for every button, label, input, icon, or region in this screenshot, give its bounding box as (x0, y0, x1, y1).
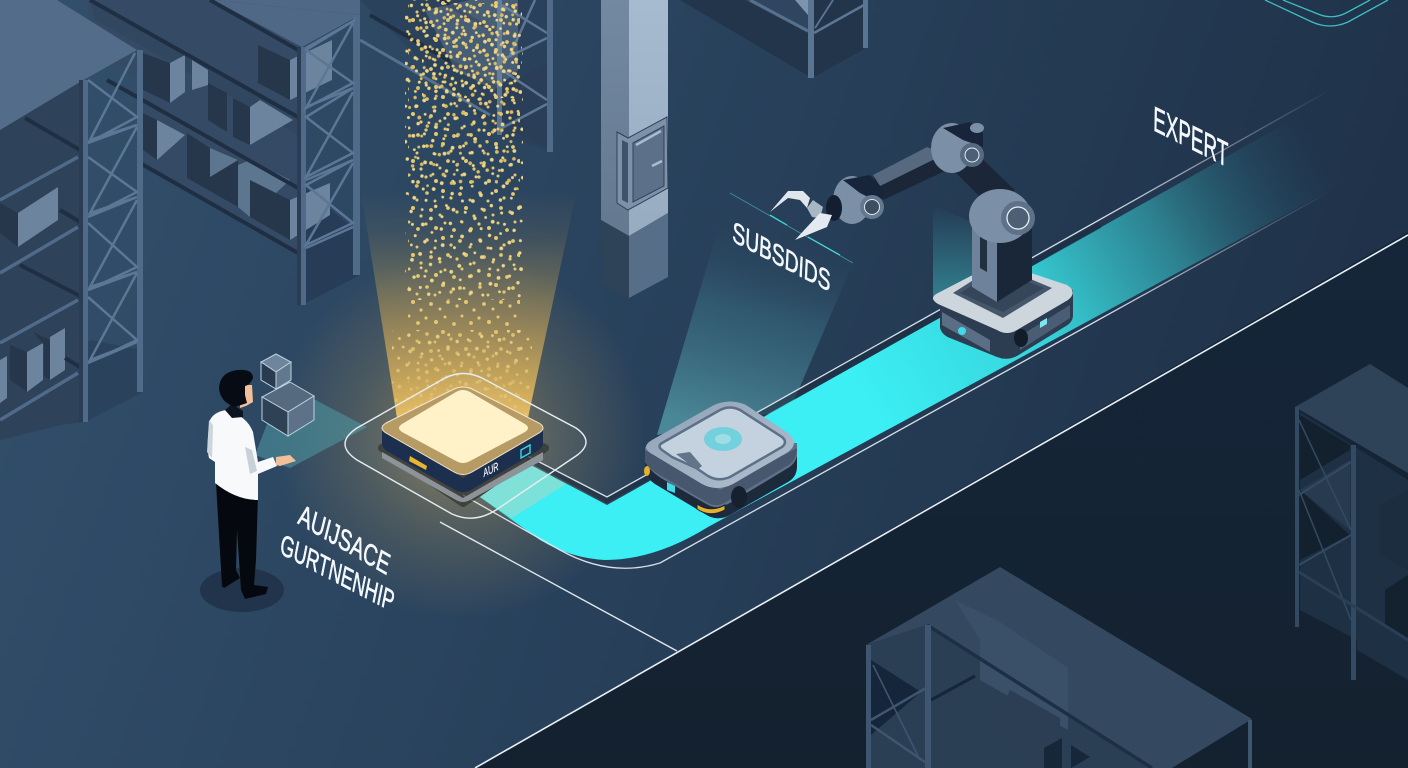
station inset (953, 265, 1052, 318)
projection top edge (730, 193, 853, 263)
station top plate (933, 264, 1073, 333)
column (972, 225, 997, 302)
holographic panel with cubes (255, 354, 367, 468)
rack floor shadow (140, 140, 360, 305)
wrist joint (826, 175, 884, 224)
shelf: lower centre rack (866, 567, 1252, 768)
label: EXPERT: EXPERT (1153, 98, 1229, 175)
shoulder joint (969, 189, 1035, 243)
glowing robot track (480, 90, 1345, 560)
side amber light (644, 466, 650, 476)
track section under lamp glow (480, 463, 566, 518)
robot top plate (646, 402, 794, 488)
small cube (261, 354, 291, 389)
amber lights (697, 504, 725, 514)
dark side (382, 428, 543, 492)
shelf: rear left behind pillar (360, 0, 553, 152)
wheel (731, 486, 747, 508)
rack beams (0, 118, 80, 420)
track lower guide line (463, 186, 1340, 568)
platform label: AUR (482, 460, 500, 480)
upper arm (953, 150, 1015, 207)
label: AUIJSACE: AUIJSACE (295, 498, 393, 582)
grey base (382, 452, 543, 502)
projection beam from robot (657, 195, 853, 435)
shelf: foreground left rack (0, 0, 143, 440)
platform shadow (382, 410, 545, 503)
amber indicator (409, 456, 427, 470)
floor edge line (440, 522, 677, 651)
legs (216, 483, 268, 599)
shelf: far top centre (680, 0, 868, 78)
cyan indicator (521, 445, 530, 458)
robot arm glow (933, 205, 1000, 300)
shelf: upper left second rack (88, 0, 360, 305)
rack boxes (143, 40, 332, 240)
rack shelf surfaces (0, 82, 80, 440)
large cube (262, 382, 314, 436)
decorative teal outline top right (1265, 0, 1388, 26)
shelf: lower right rack (1295, 364, 1408, 680)
station wheel (1014, 329, 1028, 347)
label: GURTNENHIP: GURTNENHIP (278, 529, 397, 618)
hand (276, 455, 296, 466)
neck and collar (225, 404, 243, 418)
robot screen (660, 408, 785, 479)
track dark inner edge (527, 225, 1100, 500)
rack floor shadow (0, 340, 143, 430)
cyan sensor (667, 482, 675, 493)
rack shelf surfaces (88, 0, 360, 253)
pillar access panel (617, 117, 668, 210)
station base side (940, 290, 1073, 359)
rack boxes (0, 187, 65, 403)
head (240, 385, 253, 408)
gripper (770, 191, 832, 240)
golden data particles (392, 0, 532, 425)
golden light beam (360, 185, 578, 418)
robot body (645, 443, 797, 518)
hair (219, 370, 253, 407)
projection accent lines (770, 215, 840, 255)
cyan screen icon (704, 427, 742, 451)
forearm (873, 147, 947, 200)
glowing top (399, 390, 528, 463)
amber lamp platform (345, 374, 586, 518)
screen tab (676, 452, 702, 470)
icon centre (715, 434, 731, 444)
shirt (208, 410, 277, 500)
station sensors (958, 318, 1047, 335)
tan top (382, 387, 543, 474)
structural pillar with panel (601, 0, 668, 298)
rack top plate (0, 0, 137, 130)
mobile robot with screen (644, 402, 797, 518)
warm glow on floor (260, 240, 660, 630)
label: SUBSDIDS: SUBSDIDS (732, 215, 831, 299)
floor shadow (200, 568, 284, 612)
rack beams (90, 0, 298, 253)
floor boundary line (475, 235, 1408, 768)
robot arm station (770, 122, 1073, 359)
outline footprint (345, 374, 586, 518)
dark lower floor (475, 232, 1408, 768)
track upper guide line (520, 90, 1330, 497)
character: operator (200, 370, 296, 612)
elbow joint (931, 122, 984, 173)
